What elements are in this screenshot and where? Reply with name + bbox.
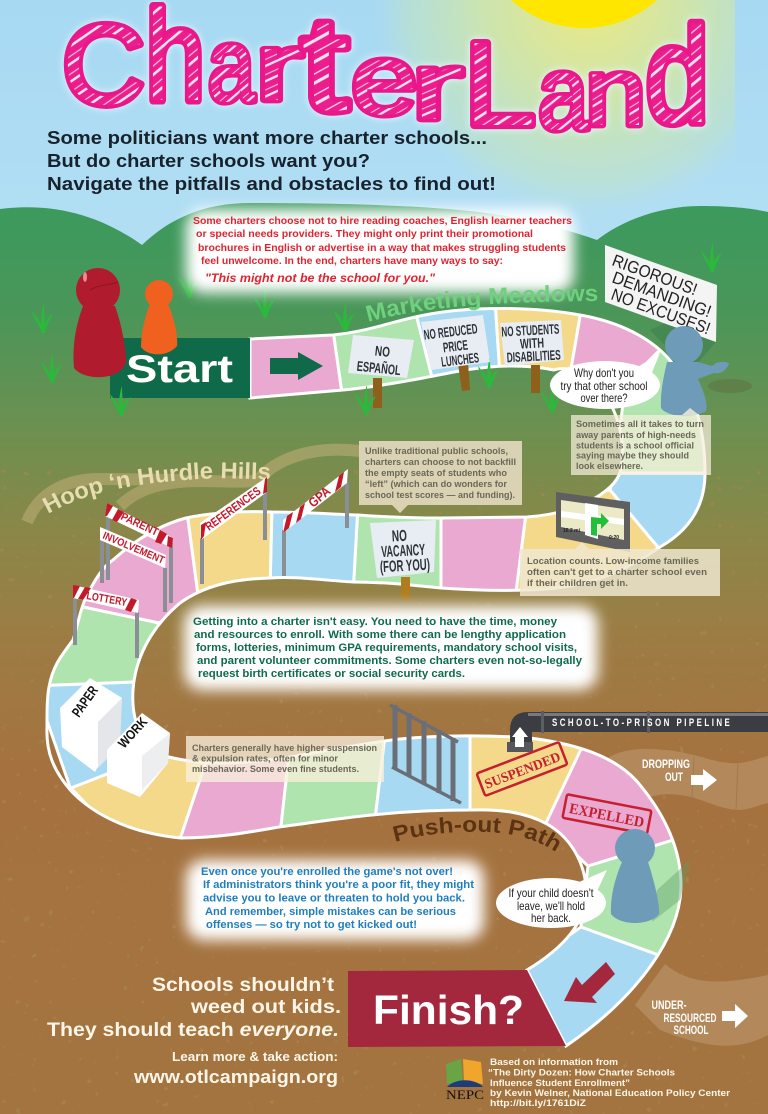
- start block: [110, 338, 250, 398]
- sign: No students with disabilities: [500, 320, 564, 393]
- enrollment callout: request birth certificates or social security cards.: [198, 668, 465, 680]
- note: backfill: [359, 441, 522, 513]
- intro heading: [47, 127, 496, 194]
- enrollment callout: [184, 606, 598, 690]
- label: under-resourced school: [652, 998, 748, 1037]
- sign: rigorous demanding no excuses: DEMANDING!: [610, 268, 714, 321]
- gate: [390, 705, 461, 803]
- hurdle: lottery: [73, 585, 139, 658]
- title: CharterLand: d: [646, 0, 709, 151]
- source citation: “The Dirty Dozen: How Charter Schools: [488, 1068, 675, 1078]
- enrollment callout: Getting into a charter isn't easy. You need to have the time, money: [193, 616, 557, 628]
- dirt speckles: [0, 470, 768, 1114]
- push-out callout: Even once you're enrolled the game's not over!: [201, 866, 453, 878]
- source citation: http://bit.ly/1761DiZ: [490, 1098, 587, 1108]
- sign: No students with disabilities: DISABILITIES: [506, 347, 561, 365]
- sign: No reduced price lunches: LUNCHES: [440, 349, 480, 370]
- sign: rigorous demanding no excuses: NO EXCUSES!: [609, 285, 713, 338]
- note: turning away parents: students is a school official: [576, 440, 694, 450]
- marketing callout: [186, 209, 574, 293]
- sign: No reduced price lunches: PRICE: [442, 337, 469, 355]
- source citation: Based on information from: [490, 1057, 618, 1067]
- note: location counts: often can't get to a charter school even: [527, 567, 707, 577]
- pawn: blue official push-out: [611, 829, 690, 923]
- note: location counts: [520, 542, 720, 596]
- stamp: expelled: EXPELLED: [568, 801, 646, 831]
- sign: No students with disabilities: WITH: [520, 334, 544, 352]
- title: CharterLand: r: [411, 34, 463, 139]
- hurdle: references: REFERENCES: [203, 484, 263, 533]
- push-out callout: offenses — so try not to get kicked out!: [206, 919, 417, 931]
- start block: Start: [126, 348, 233, 391]
- note: turning away parents: Sometimes all it takes to turn: [576, 419, 704, 429]
- title: CharterLand: [62, 0, 709, 151]
- board outline: [47, 308, 705, 1046]
- label: dropping out: OUT: [665, 770, 683, 784]
- sign: no vacancy: [370, 520, 436, 599]
- note: suspension rates: Charters generally have higher suspension: [192, 743, 377, 753]
- title: CharterLand: n: [585, 39, 646, 145]
- hurdle: involvement: INVOLVEMENT: [101, 530, 167, 567]
- intro heading: But do charter schools want you?: [47, 150, 370, 171]
- sign: rigorous demanding no excuses: RIGOROUS!: [610, 251, 700, 299]
- note: suspension rates: [186, 736, 384, 782]
- speech bubble: other school: over there?: [580, 391, 628, 405]
- note: backfill: Unlike traditional public schools,: [365, 446, 508, 456]
- sign: No Espanol: [348, 335, 414, 408]
- side road: dropping out: [605, 749, 768, 810]
- hurdle: references: [200, 477, 267, 584]
- sign: no vacancy: NO: [391, 528, 407, 546]
- speech bubble: other school: [550, 353, 660, 409]
- finish block: [348, 970, 566, 1047]
- pipe: school-to-prison pipeline: [507, 711, 768, 752]
- marketing callout: Some charters choose not to hire reading coaches, English learner teachers: [193, 216, 572, 227]
- side road: under-resourced school: [635, 964, 768, 1046]
- grass tufts: [32, 242, 722, 413]
- enrollment callout: and resources to enroll. With some there can be lengthy application: [194, 629, 566, 641]
- note: location counts: if their children get in.: [527, 578, 628, 588]
- icon: GPS navigator: [556, 492, 630, 552]
- title: CharterLand: a: [538, 35, 589, 151]
- source citation: by Kevin Welner, National Education Policy Center: [490, 1088, 731, 1098]
- note: location counts: Location counts. Low-income families: [527, 556, 699, 566]
- push-out callout: If administrators think you're a poor fit, they might: [203, 879, 474, 891]
- label: dropping out: DROPPING: [642, 757, 690, 771]
- pawn: blue official pointing: [661, 326, 752, 416]
- push-out callout: And remember, simple mistakes can be serious: [205, 906, 456, 918]
- note: turning away parents: look elsewhere.: [576, 461, 643, 471]
- sign: No students with disabilities: NO STUDENTS: [501, 321, 560, 340]
- arrow: up into pipe: [512, 727, 528, 747]
- paper stack: work: [107, 713, 170, 797]
- sign: rigorous demanding no excuses: [605, 245, 717, 372]
- paper stack: paper: PAPER: [68, 683, 101, 720]
- sign: no vacancy: VACANCY: [381, 542, 426, 561]
- note: suspension rates: misbehavior. Some even fine students.: [192, 764, 359, 774]
- note: backfill: school test scores — and funding).: [365, 490, 515, 500]
- note: turning away parents: away parents of high-needs: [576, 430, 696, 440]
- hurdle: GPA: [282, 469, 349, 576]
- closing message: [47, 974, 341, 1087]
- hurdle: parent: [105, 503, 173, 603]
- sign: No Espanol: ESPAÑOL: [356, 357, 402, 378]
- sign: No reduced price lunches: NO REDUCED: [423, 320, 478, 343]
- NEPC logo: [446, 1059, 484, 1102]
- speech bubble: hold her back: leave, we'll hold: [517, 899, 585, 913]
- grass over sign post: [355, 385, 376, 415]
- arrow: to finish: [564, 962, 615, 1003]
- intro heading: Some politicians want more charter schools...: [47, 127, 487, 148]
- sun glow: [375, 0, 735, 215]
- finish block: Finish?: [373, 987, 524, 1033]
- closing message: They should teach everyone.: [47, 1019, 339, 1041]
- label: dropping out: [642, 757, 717, 791]
- section title: Marketing Meadows: Marketing Meadows: [366, 285, 598, 322]
- enrollment callout: and parent volunteer commitments. Some charters even not-so-legally: [197, 655, 582, 667]
- label: under-resourced school: RESOURCED: [664, 1011, 717, 1025]
- speech bubble: hold her back: If your child doesn't: [508, 886, 594, 900]
- push-out callout: advise you to leave or threaten to hold you back.: [203, 892, 465, 904]
- sign: No Espanol: NO: [374, 342, 391, 360]
- note: suspension rates: & expulsion rates, often for minor: [192, 754, 338, 764]
- enrollment callout: forms, lotteries, minimum GPA requirements, mandatory school visits,: [196, 642, 577, 654]
- closing message: www.otlcampaign.org: [133, 1067, 338, 1087]
- title: CharterLand: a: [208, 8, 255, 124]
- section title: Push-out Path: Push-out Path: [392, 817, 560, 852]
- sky background: [0, 0, 768, 300]
- NEPC logo: NEPC: [446, 1087, 484, 1102]
- pawn: orange child: [141, 280, 177, 354]
- sign: No reduced price lunches: [421, 315, 490, 391]
- note: turning away parents: [571, 408, 711, 475]
- sun: [475, 0, 693, 28]
- note: backfill: the empty seats of students who: [365, 468, 507, 478]
- note: backfill: charters can choose to not backfill: [365, 457, 516, 467]
- title: CharterLand: L: [464, 19, 536, 151]
- speech bubble: other school: Why don't you: [574, 366, 634, 380]
- icon: GPS navigator: 16.2 mi: [563, 528, 581, 534]
- hurdle: GPA: GPA: [305, 483, 334, 510]
- grass over start block: [110, 386, 131, 416]
- marketing callout: or special needs providers. They might only print their promotional: [196, 229, 533, 240]
- board cells: [35, 300, 720, 1060]
- intro heading: Navigate the pitfalls and obstacles to find out!: [47, 173, 496, 194]
- hurdle: lottery: LOTTERY: [85, 590, 128, 609]
- marketing callout: brochures in English or advertise in a way that makes struggling students: [198, 243, 566, 254]
- pipe: school-to-prison pipeline: SCHOOL-TO-PRISON PIPELINE: [552, 717, 730, 729]
- game board path: [35, 300, 720, 1060]
- speech bubble: hold her back: her back.: [531, 911, 571, 925]
- label: under-resourced school: UNDER-: [652, 998, 686, 1012]
- pawn: red parent: [73, 268, 126, 377]
- source citation: [488, 1057, 731, 1108]
- paper stack: paper: [60, 678, 122, 772]
- sign: no vacancy: (FOR YOU): [380, 557, 430, 576]
- note: backfill: “left” (which can do wonders for: [365, 479, 507, 489]
- section title: Hoop 'n Hurdle Hills: Hoop ‘n Hurdle Hills: [42, 462, 270, 514]
- closing message: Schools shouldn’t: [152, 974, 335, 996]
- push-out callout: [186, 860, 484, 940]
- closing message: Learn more & take action:: [172, 1049, 338, 1064]
- icon: GPS navigator: 0:20: [609, 535, 619, 541]
- paper stack: work: WORK: [115, 714, 150, 751]
- arrow: start right: [270, 352, 323, 380]
- closing message: weed out kids.: [190, 996, 341, 1018]
- title: CharterLand: e: [351, 24, 418, 136]
- road swooshes behind Hoop and Hurdle Hills: [27, 450, 360, 522]
- hurdle: parent: PARENT: [119, 511, 160, 539]
- speech bubble: other school: try that other school: [560, 379, 648, 393]
- speech bubble: hold her back: [496, 870, 607, 928]
- title: CharterLand: r: [255, 14, 304, 121]
- title: CharterLand: C: [62, 3, 145, 129]
- note: turning away parents: saying maybe they should: [576, 450, 689, 460]
- stamp: suspended: SUSPENDED: [483, 750, 563, 793]
- label: under-resourced school: SCHOOL: [674, 1023, 708, 1037]
- marketing callout: feel unwelcome. In the end, charters have many ways to say:: [201, 256, 503, 267]
- marketing callout: "This might not be the school for you.": [205, 271, 435, 285]
- source citation: Influence Student Enrollment”: [490, 1078, 630, 1088]
- hurdle: involvement: [100, 527, 167, 612]
